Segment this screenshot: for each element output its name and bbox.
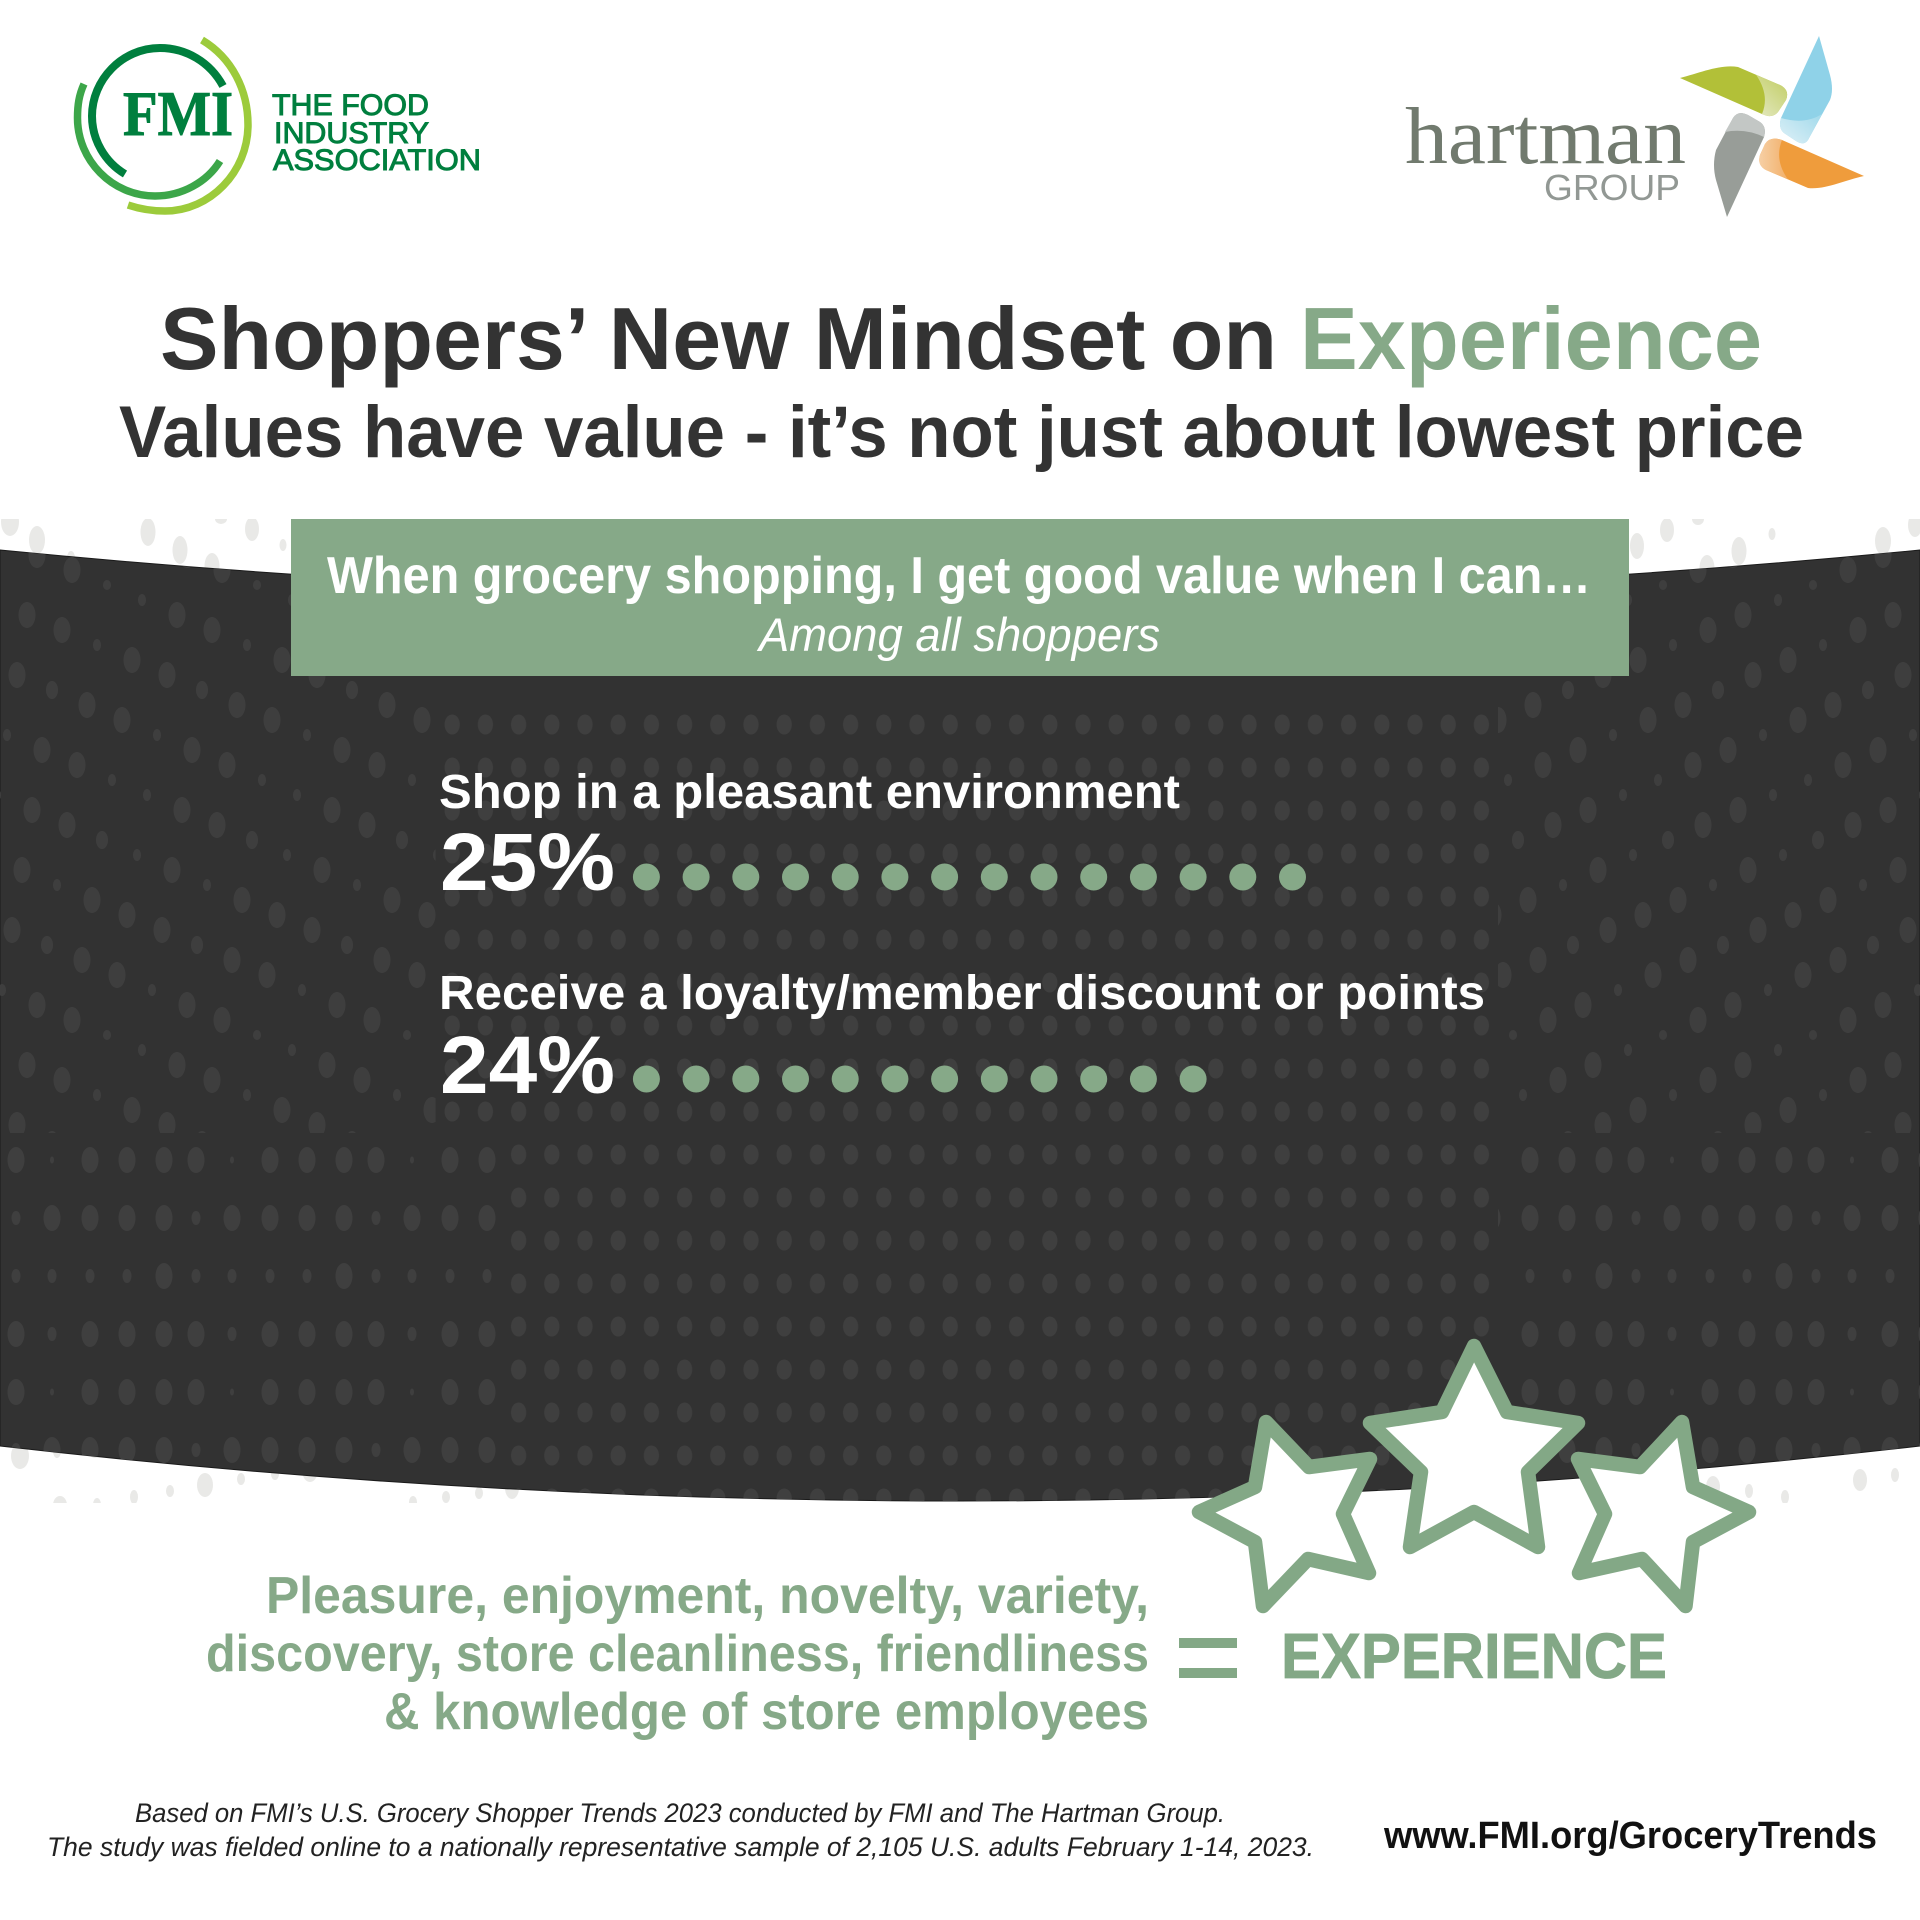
stat value: 24% xyxy=(440,1020,615,1111)
icon: equals sign xyxy=(1179,1638,1237,1678)
FMI tagline: THE FOOD xyxy=(272,89,429,122)
text block: experience definition: discovery, store cleanliness, friendliness xyxy=(206,1625,1149,1683)
footnote: The study was fielded online to a nationally representative sample of 2,105 U.S. adults February 1-14, 2023. xyxy=(47,1832,1314,1862)
hartman wordmark: hartman xyxy=(1405,93,1686,181)
footnote: Based on FMI’s U.S. Grocery Shopper Trends 2023 conducted by FMI and The Hartman Group. xyxy=(135,1798,1225,1828)
icon: three stars xyxy=(1199,1346,1749,1606)
footnote xyxy=(47,1798,1314,1862)
text block: experience definition xyxy=(206,1567,1149,1741)
stat label: Shop in a pleasant environment xyxy=(439,766,1180,819)
stat: loyalty discount xyxy=(439,967,1485,1111)
dot bar 25% xyxy=(633,864,1306,890)
dot bar 24% xyxy=(633,1066,1207,1092)
FMI tagline: INDUSTRY xyxy=(274,117,429,150)
GROUP wordmark: GROUP xyxy=(1544,167,1680,208)
title: Shoppers’ New Mindset on xyxy=(160,289,1277,388)
EXPERIENCE label: EXPERIENCE xyxy=(1281,1620,1667,1692)
panel: dark dotted band xyxy=(0,550,1920,1560)
text block: experience definition: & knowledge of store employees xyxy=(384,1683,1149,1741)
icon: FMI rings xyxy=(78,40,248,211)
FMI tagline: ASSOCIATION xyxy=(273,144,481,177)
website URL: www.FMI.org/GroceryTrends xyxy=(1383,1815,1877,1857)
icon: pinwheel xyxy=(1680,36,1864,217)
text block: experience definition: Pleasure, enjoyment, novelty, variety, xyxy=(266,1567,1149,1625)
title: Experience xyxy=(1300,289,1762,388)
FMI logo xyxy=(78,40,481,211)
light dots above and below band xyxy=(1,508,1920,1514)
FMI wordmark: FMI xyxy=(123,78,233,149)
Hartman Group logo xyxy=(1405,36,1864,217)
banner subheading: Among all shoppers xyxy=(756,608,1160,661)
stat label: Receive a loyalty/member discount or points xyxy=(439,967,1485,1020)
panel: question banner xyxy=(291,519,1629,676)
stat: pleasant environment xyxy=(439,766,1306,908)
stat value: 25% xyxy=(440,817,615,908)
FMI tagline xyxy=(272,89,481,177)
title xyxy=(160,289,1762,388)
subtitle: Values have value - it’s not just about lowest price xyxy=(119,392,1804,473)
banner heading: When grocery shopping, I get good value when I can… xyxy=(327,547,1591,605)
